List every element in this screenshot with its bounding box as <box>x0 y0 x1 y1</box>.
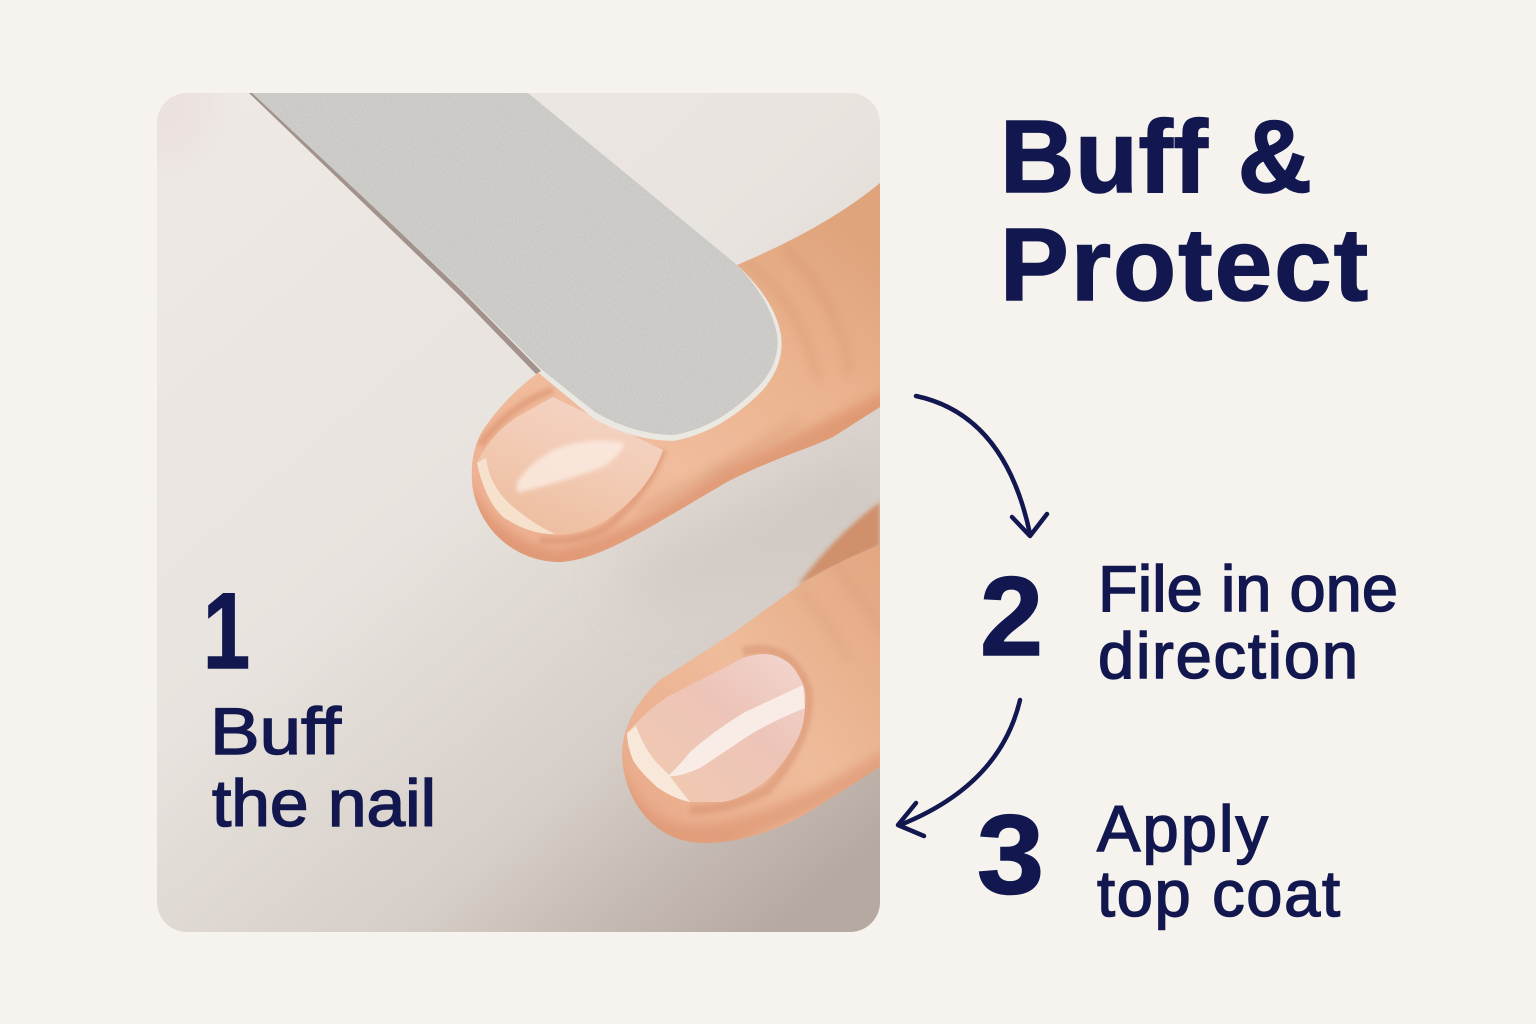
step 3 number: 3 <box>977 792 1044 917</box>
step 3 label <box>1097 792 1340 930</box>
lower nail tip <box>627 726 690 802</box>
step 2 label: direction <box>1098 619 1358 692</box>
nail file <box>248 93 782 441</box>
infographic <box>157 93 1396 932</box>
upper nail highlight <box>517 441 625 493</box>
knuckle creases <box>644 422 794 509</box>
step 3 label: top coat <box>1097 857 1340 930</box>
soft shadow under upper finger <box>620 440 880 610</box>
middle finger behind <box>797 502 880 586</box>
file surface <box>252 93 778 435</box>
upper finger <box>472 183 880 562</box>
cuticle shading around nail <box>480 390 663 540</box>
upper nail <box>477 397 663 535</box>
file underside <box>538 265 782 441</box>
title: Protect <box>1000 207 1368 322</box>
panel: nail buffing photo <box>157 93 880 932</box>
title: Buff & <box>1000 99 1312 214</box>
title <box>1000 99 1368 322</box>
step 2 number: 2 <box>980 554 1043 679</box>
lower finger creases <box>800 560 885 660</box>
step 1 label: the nail <box>212 766 436 840</box>
lower nail highlight <box>668 685 805 776</box>
step 1 label <box>212 705 432 828</box>
step 3 label: Apply <box>1097 792 1268 865</box>
lower nail <box>627 654 805 802</box>
arrow: step 1 to step 2 <box>916 396 1047 536</box>
lower finger shading <box>624 753 880 843</box>
step 1 label: Buff <box>210 694 342 768</box>
top-left tint <box>115 45 215 165</box>
upper finger lower shading <box>470 390 885 575</box>
cuticle shading <box>690 650 808 810</box>
step 1 number: 1 <box>203 570 250 691</box>
lower finger <box>622 545 880 843</box>
upper nail tip <box>477 458 555 534</box>
step 2 label: File in one <box>1098 552 1398 625</box>
step 2 label <box>1098 552 1398 692</box>
arrow: step 2 to step 3 <box>898 700 1020 836</box>
